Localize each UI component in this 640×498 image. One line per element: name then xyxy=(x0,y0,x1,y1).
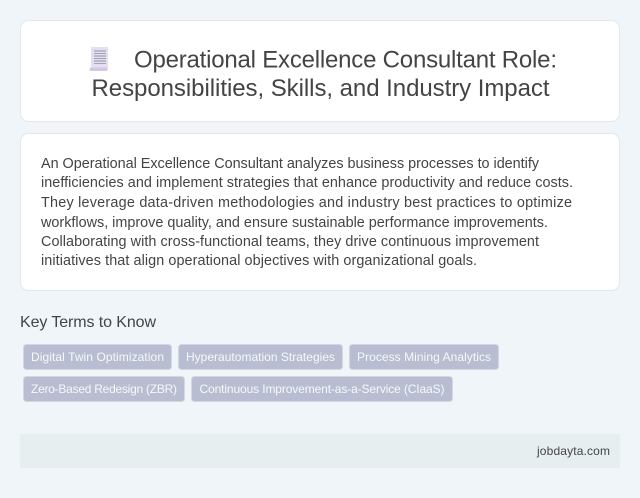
tag: zero-based redesign: Zero-Based Redesign (ZBR) xyxy=(31,382,177,396)
tag: hyperautomation: Hyperautomation Strategies xyxy=(186,350,335,364)
tag: process mining: Process Mining Analytics xyxy=(357,350,491,364)
text block: description: An Operational Excellence Consultant analyzes business processes to identify xyxy=(41,156,540,172)
tag: hyperautomation xyxy=(178,344,342,370)
tag: continuous improvement: Continuous Improvement-as-a-Service (CIaaS) xyxy=(200,382,444,396)
panel: description xyxy=(20,134,620,290)
tag: continuous improvement xyxy=(192,376,452,402)
panel: title card xyxy=(20,20,620,122)
heading: key terms: Key Terms to Know xyxy=(20,314,156,331)
heading xyxy=(92,46,557,102)
text block: description: initiatives that align operational objectives with organizational goals. xyxy=(41,253,477,269)
text block: description: They leverage data-driven methodologies and industry best practices to optimize xyxy=(41,195,572,211)
tag: digital twin xyxy=(24,344,172,370)
text block: description: Collaborating with cross-functional teams, they drive continuous improvement xyxy=(41,234,539,250)
text block: description: workflows, improve quality, and ensure sustainable performance improvements. xyxy=(40,215,548,231)
icon: document scroll xyxy=(90,47,108,71)
footer: jobdayta.com xyxy=(536,444,610,458)
tag: process mining xyxy=(350,344,498,370)
footer xyxy=(20,434,620,468)
text block: description: inefficiencies and implement strategies that enhance productivity and reduce costs. xyxy=(41,175,573,191)
tag: zero-based redesign xyxy=(24,376,184,402)
tag: digital twin: Digital Twin Optimization xyxy=(31,350,164,364)
heading: Operational Excellence Consultant Role: xyxy=(134,46,557,74)
tags xyxy=(24,344,498,402)
text block: description xyxy=(40,156,573,269)
heading: Responsibilities, Skills, and Industry Impact xyxy=(92,75,550,102)
